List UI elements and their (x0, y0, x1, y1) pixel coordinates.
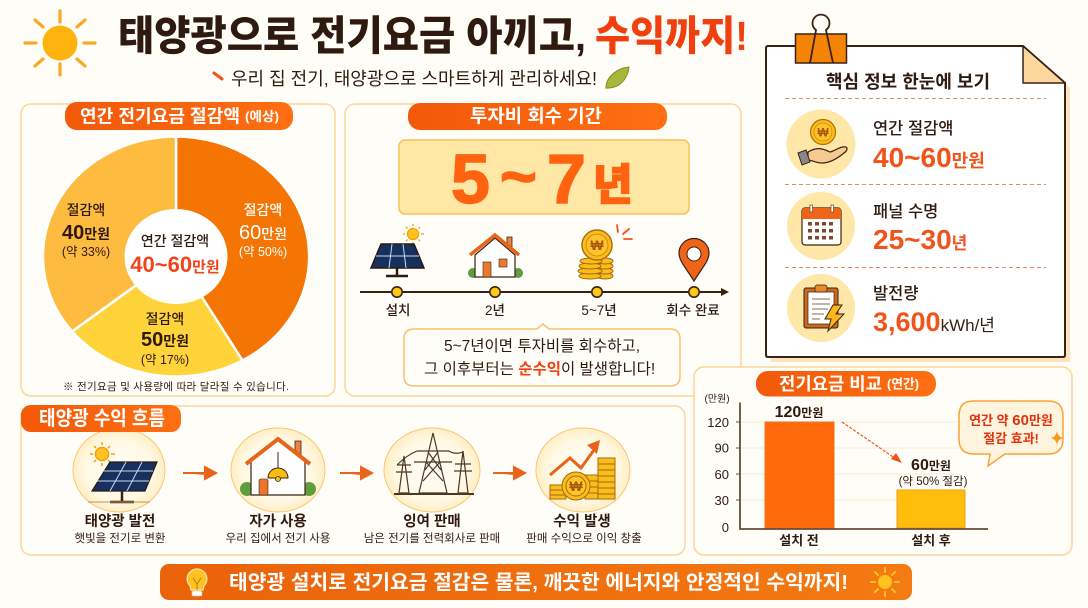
step: profit: ₩ (569, 478, 583, 494)
bar chart: 설치 전 (779, 533, 819, 548)
icon: binder clip (796, 15, 846, 63)
bar chart: 0 (722, 520, 729, 535)
step: solar generation (73, 428, 166, 545)
callout: savings effect: 연간 약 60만원 (969, 412, 1053, 429)
callout: payback explanation (404, 324, 680, 386)
timeline: 5~7년 (581, 303, 617, 318)
title: 수익까지! (595, 13, 748, 59)
heading: payback (408, 103, 667, 130)
panel: payback period (345, 103, 741, 396)
big number (399, 140, 689, 218)
heading: comparison: 전기요금 비교 (779, 374, 882, 394)
heading: annual savings (65, 102, 293, 130)
big number: 5 (451, 140, 490, 218)
bar chart: 60 (715, 467, 729, 482)
icon: sun (25, 11, 95, 75)
step: self use: 우리 집에서 전기 사용 (226, 532, 330, 545)
big number: ~ (500, 142, 537, 212)
arrow: reduction (842, 422, 902, 463)
bar chart: 30 (715, 493, 729, 508)
pie label: 50: (약 17%) (141, 352, 189, 367)
pie label: 40: (약 33%) (62, 244, 110, 259)
pie label: 50: 50만원 (141, 329, 189, 351)
icon: calendar (802, 205, 841, 245)
bottom banner: 태양광 설치로 전기요금 절감은 물론, 깨끗한 에너지와 안정적인 수익까지! (229, 571, 848, 594)
bar chart: 120만원 (775, 404, 823, 421)
pie centre label (130, 233, 220, 277)
callout: payback explanation: 그 이후부터는 순수익이 발생합니다! (424, 360, 655, 378)
step: profit: 판매 수익으로 이익 창출 (526, 532, 642, 545)
item: panel life: 25~30년 (873, 224, 967, 255)
icon: solar panel (371, 224, 424, 276)
pie label: 60 (239, 202, 287, 259)
arrow: step 2 to 3 (340, 467, 372, 479)
step: surplus sale (364, 428, 500, 545)
timeline (360, 287, 729, 318)
item: panel life (787, 192, 967, 260)
item: generation: 발전량 (873, 284, 919, 303)
pie label: 40: 40만원 (62, 222, 110, 244)
bar chart: (약 50% 절감) (899, 474, 968, 488)
icon: small sun (871, 568, 899, 596)
bar chart: 60만원 (911, 457, 951, 474)
icon: hand with coin (798, 120, 847, 165)
bottom banner (160, 564, 912, 600)
heading: comparison: (연간) (887, 376, 919, 392)
pie label: 50: 절감액 (146, 311, 184, 327)
panel: bill comparison (694, 367, 1072, 555)
bar chart (704, 393, 988, 548)
heading: annual savings: 연간 전기요금 절감액 (80, 106, 240, 126)
icon: coins (578, 225, 632, 279)
panel: profit flow (21, 405, 685, 555)
pie centre label: 연간 절감액 (141, 233, 209, 249)
step: surplus sale: 잉여 판매 (403, 513, 461, 530)
icon: light bulb (187, 569, 207, 596)
step: surplus sale: 남은 전기를 전력회사로 판매 (364, 532, 500, 545)
step: self use: 자가 사용 (249, 513, 307, 530)
pie label: 60: 절감액 (244, 202, 282, 218)
bar chart: 90 (715, 440, 729, 456)
heading: annual savings: (예상) (245, 109, 279, 124)
pie label: 60: 60만원 (239, 222, 287, 244)
pie label: 40: 절감액 (67, 202, 105, 218)
icon: coins: ₩ (590, 237, 604, 253)
subtitle: 우리 집 전기, 태양광으로 스마트하게 관리하세요! (231, 69, 597, 89)
icon: clipboard with bolt (804, 285, 844, 331)
icon: hand with coin: ₩ (817, 126, 829, 140)
item: annual savings: 연간 절감액 (873, 119, 953, 138)
bar chart: 120 (707, 415, 729, 430)
panel: key info note (766, 15, 1070, 362)
item: generation: 3,600kWh/년 (873, 307, 995, 337)
arrow: step 3 to 4 (493, 467, 525, 479)
panel: annual savings (21, 102, 335, 396)
item: generation (787, 274, 995, 342)
big number: 년 (593, 162, 633, 210)
pie chart (43, 136, 309, 377)
timeline: 설치 (386, 303, 410, 318)
pie label: 60: (약 50%) (239, 244, 287, 259)
title: 태양광으로 전기요금 아끼고, (118, 13, 586, 59)
icon: location pin (679, 239, 709, 281)
arrow: step 1 to 2 (183, 467, 216, 479)
callout: payback explanation: 5~7년이면 투자비를 회수하고, (444, 337, 640, 355)
timeline: 2년 (485, 303, 505, 318)
step: self use (226, 428, 330, 545)
pie centre label: 40~60만원 (130, 252, 220, 277)
step: profit (526, 428, 642, 545)
step: solar generation: 햇빛을 전기로 변환 (74, 532, 166, 545)
bar chart: (만원) (704, 393, 730, 405)
pie label: 40 (62, 202, 110, 259)
step: solar generation: 태양광 발전 (85, 513, 155, 530)
heading: profit flow: 태양광 수익 흐름 (39, 407, 165, 430)
footnote: ※ 전기요금 및 사용량에 따라 달라질 수 있습니다. (63, 381, 289, 393)
item: annual savings (786, 110, 985, 178)
timeline: 회수 완료 (666, 303, 720, 318)
heading: payback: 투자비 회수 기간 (470, 106, 602, 126)
bar chart: 설치 후 (911, 533, 951, 548)
step: profit: 수익 발생 (553, 513, 611, 530)
callout: savings effect (959, 401, 1063, 466)
icon: house (468, 235, 523, 278)
item: annual savings: 40~60만원 (873, 142, 985, 173)
item: panel life: 패널 수명 (873, 202, 938, 221)
big number: 7 (547, 140, 586, 218)
callout: savings effect: 절감 효과! (983, 431, 1039, 446)
heading: comparison (756, 371, 936, 396)
pie label: 50 (141, 311, 189, 367)
note heading: 핵심 정보 한눈에 보기 (826, 72, 990, 92)
